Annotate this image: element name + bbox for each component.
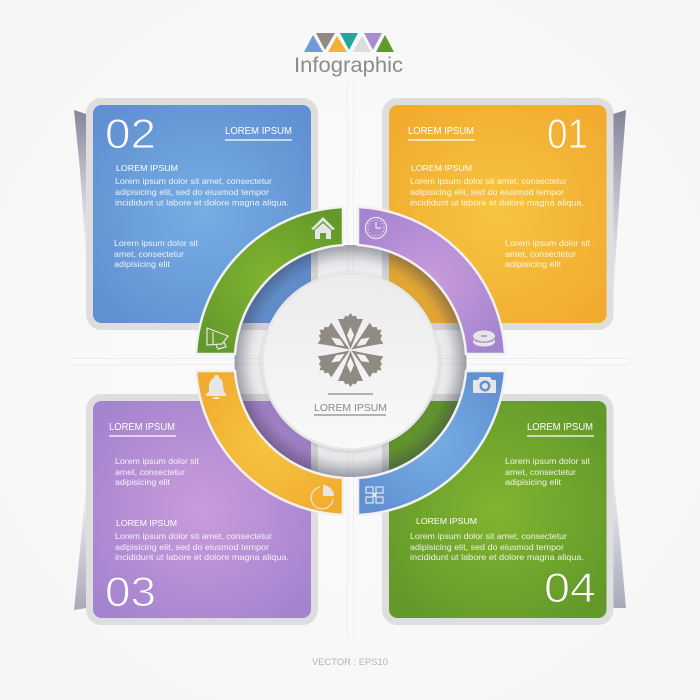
ring chart [196,207,505,515]
text block 01 short [505,238,591,269]
text block 01 short: Lorem ipsum dolor sit [505,238,591,248]
text block 04 main [410,516,584,562]
title logo [294,33,403,77]
number 03: 03 [105,568,156,615]
text block 03 main: Lorem ipsum dolor sit amet, consectetur [115,531,272,541]
text block 03 main: incididunt ut labore et dolore magna aliqua. [115,552,289,562]
text block 01 main: adipisicing elit, sed do eiusmod tempor [410,187,564,197]
text block 02 main: adipisicing elit, sed do eiusmod tempor [115,187,269,197]
text block 03 main [115,518,289,562]
number 01: 01 [547,110,588,157]
footer text: VECTOR : EPS10 [312,657,388,668]
text block 01 main: LOREM IPSUM [411,163,472,173]
text block 04 short [505,456,591,487]
cross dividers [70,83,630,640]
icon: clock [366,218,386,238]
center circle [262,274,438,450]
text block 04 short: Lorem ipsum dolor sit [505,456,591,466]
icon: coin stack [473,330,495,346]
panel: 04 green [386,398,610,622]
panel: 03 purple [90,398,314,622]
text block 04 short: amet, consectetur [505,467,576,477]
text block 04 short: adipisicing elit [505,477,562,487]
text block 01 main [410,163,584,208]
text block 01 short: adipisicing elit [505,259,562,269]
text block 03 main: adipisicing elit, sed do eiusmod tempor [115,542,269,552]
text block 03 short [115,456,200,487]
center label: LOREM IPSUM [314,402,387,414]
text block 03 main: LOREM IPSUM [116,518,177,528]
center label [314,394,387,415]
text block 04 main: adipisicing elit, sed do eiusmod tempor [410,542,564,552]
text block 04 main: incididunt ut labore et dolore magna aliqua. [410,552,584,562]
text block 02 short: adipisicing elit [114,259,171,269]
text block 01 main: incididunt ut labore et dolore magna aliqua. [410,198,584,208]
text block 03 short: Lorem ipsum dolor sit [115,456,200,466]
title text: Infographic [294,54,403,77]
text block 04 main: Lorem ipsum dolor sit amet, consectetur [410,531,567,541]
number 04: 04 [544,564,596,611]
heading 01: LOREM IPSUM [408,126,474,137]
heading 04: LOREM IPSUM [527,422,593,433]
text block 02 main: Lorem ipsum dolor sit amet, consectetur [115,176,272,186]
icon: pie chart [311,485,334,509]
text block 02 main [115,163,289,208]
number 02: 02 [105,110,156,157]
panel: 02 blue [90,102,314,326]
ring shadow [234,245,466,477]
segment: purple [358,207,505,354]
icon: connected squares [366,487,383,503]
heading 02: LOREM IPSUM [225,126,292,137]
icon: triangle row [304,33,394,52]
text block 01 short: amet, consectetur [505,249,576,259]
text block 03 short: amet, consectetur [115,467,185,477]
text block 02 short: amet, consectetur [114,249,184,259]
text block 02 main: incididunt ut labore et dolore magna aliqua. [115,198,289,208]
icon: home [311,217,335,239]
segment: green [196,207,343,354]
icon: flower logo [313,313,388,387]
text block 02 short [114,238,199,269]
icon: megaphone [207,328,228,349]
text block 04 main: LOREM IPSUM [416,516,477,526]
icon: bell [206,375,226,399]
text block 03 short: adipisicing elit [115,477,171,487]
heading 03: LOREM IPSUM [109,422,175,433]
segment: orange [196,371,343,515]
icon: camera [473,377,496,393]
text block 02 main: LOREM IPSUM [116,163,178,173]
flap shadows [74,110,626,610]
text block 01 main: Lorem ipsum dolor sit amet, consectetur [410,176,567,186]
panel: 01 orange [386,102,610,326]
segment: blue [358,371,505,515]
text block 02 short: Lorem ipsum dolor sit [114,238,199,248]
